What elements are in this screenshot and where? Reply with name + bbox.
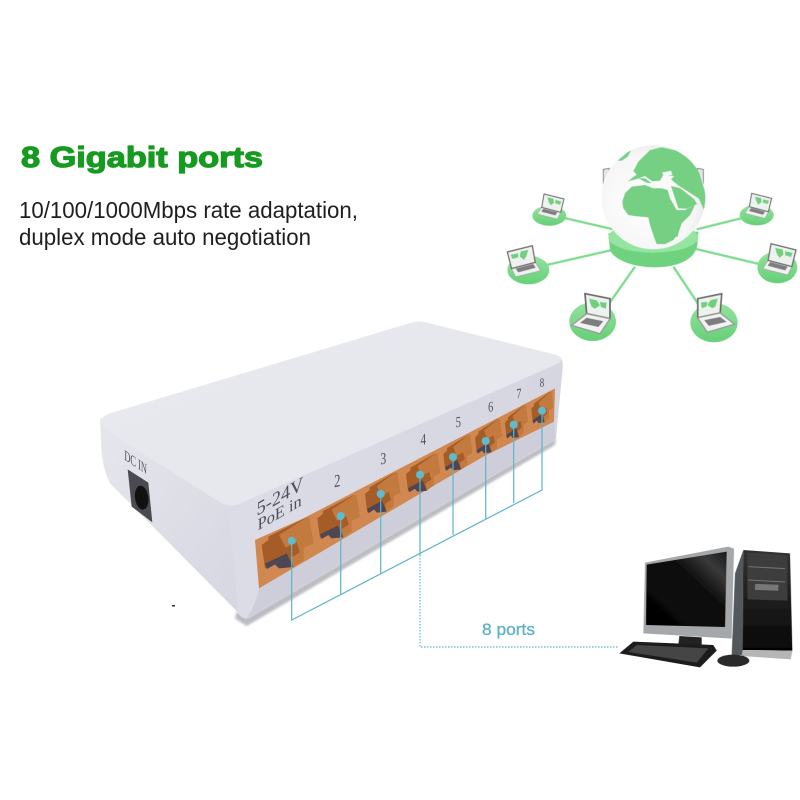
lower front band (247, 422, 556, 618)
switch shadow (235, 438, 556, 626)
infographic canvas (20, 145, 798, 668)
printed labels: PoE in (258, 490, 302, 534)
node: upper left laptop (532, 194, 566, 226)
printed labels (124, 376, 545, 534)
printed labels: 7 (517, 385, 521, 402)
description text: 10/100/1000Mbps rate adaptation, (19, 197, 358, 223)
mouse (717, 655, 749, 667)
printed labels: 2 (334, 471, 340, 492)
africa (622, 185, 695, 244)
greenland (618, 150, 632, 161)
spokes (547, 217, 763, 312)
keyboard (619, 642, 717, 667)
eurasia (628, 147, 708, 209)
small speck (172, 605, 175, 606)
printed labels: 3 (380, 450, 386, 469)
title: 8 Gigabit ports (21, 142, 263, 174)
madagascar (676, 232, 679, 237)
black sea (662, 171, 672, 176)
monitor stand (678, 636, 715, 647)
computer tower (732, 550, 792, 659)
port dots (288, 407, 546, 545)
globe (601, 145, 708, 249)
desktop computer (619, 547, 792, 667)
hidden laptops behind globe (603, 168, 703, 183)
printed labels: 5 (456, 413, 461, 431)
network globe illustration (507, 168, 797, 342)
globe base (608, 222, 698, 267)
network switch (100, 321, 563, 626)
node: lower right laptop (690, 294, 738, 342)
printed labels: DC IN (124, 448, 147, 478)
switch front face (228, 357, 563, 618)
power socket (128, 469, 152, 522)
ethernet ports (262, 392, 553, 569)
description text (19, 197, 358, 250)
node: middle right laptop (757, 244, 797, 283)
switch top face (100, 321, 561, 506)
description text: duplex mode auto negotiation (19, 224, 311, 250)
printed labels: 4 (421, 430, 426, 449)
port connector lines (288, 407, 618, 647)
printed labels: 8 (540, 376, 545, 390)
switch left face (100, 418, 242, 616)
mediterranean islands (638, 178, 652, 183)
node: lower left laptop (569, 294, 616, 341)
8 ports label: 8 ports (482, 621, 535, 639)
printed labels: 5-24V (257, 471, 303, 521)
node: middle left laptop (507, 246, 549, 284)
orange port strip (255, 388, 555, 588)
node: upper right laptop (740, 193, 774, 225)
monitor (643, 547, 734, 639)
printed labels: 6 (488, 399, 493, 415)
arabia (671, 186, 697, 209)
